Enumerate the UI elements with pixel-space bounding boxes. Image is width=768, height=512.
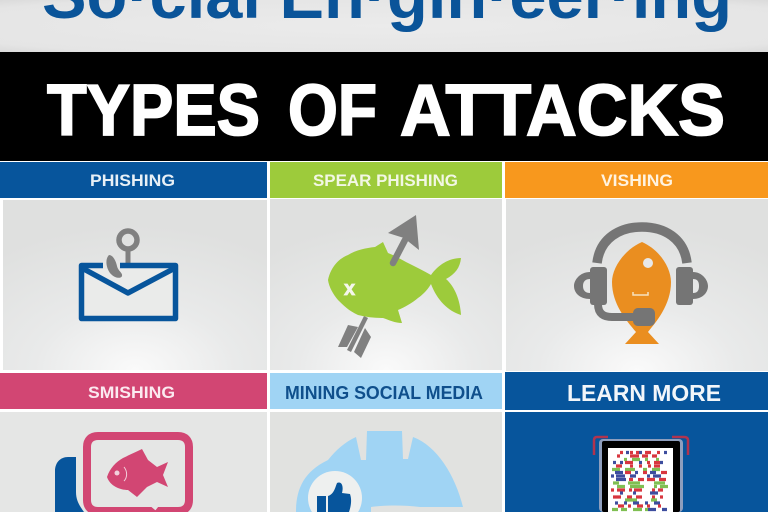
- icon: fish with arrow: [328, 215, 461, 358]
- label: smishing: SMISHING: [88, 383, 175, 402]
- label: vishing: VISHING: [601, 172, 673, 190]
- heading: OF: [288, 71, 377, 151]
- icon: helmet with thumbs up: [296, 431, 463, 512]
- panel: spear phishing: [270, 162, 502, 370]
- QR code: [611, 452, 668, 510]
- panel: phishing: [0, 162, 267, 370]
- icon: fish: [107, 449, 168, 497]
- text: x eye: x: [344, 278, 355, 300]
- icon: thumbs up: [317, 482, 351, 512]
- icon: hooked envelope: [82, 231, 176, 318]
- heading: [47, 71, 725, 151]
- heading: ATTACKS: [400, 71, 725, 151]
- icon: phone with QR code: [594, 437, 688, 512]
- icon: fish with headset: [574, 227, 708, 344]
- panel: learn more: [505, 372, 768, 512]
- label: spear phishing: SPEAR PHISHING: [313, 172, 458, 190]
- icon: phone with message bubble: [55, 436, 189, 512]
- panel: smishing: [0, 373, 267, 512]
- label: learn more: LEARN MORE: [567, 380, 721, 406]
- label: phishing: PHISHING: [90, 172, 175, 190]
- label: mining social media: MINING SOCIAL MEDIA: [285, 383, 483, 403]
- heading banner: [0, 52, 768, 161]
- heading: TYPES: [47, 71, 260, 151]
- title band: [0, 0, 768, 52]
- panel: mining social media: [270, 373, 502, 512]
- panel: vishing: [505, 162, 768, 371]
